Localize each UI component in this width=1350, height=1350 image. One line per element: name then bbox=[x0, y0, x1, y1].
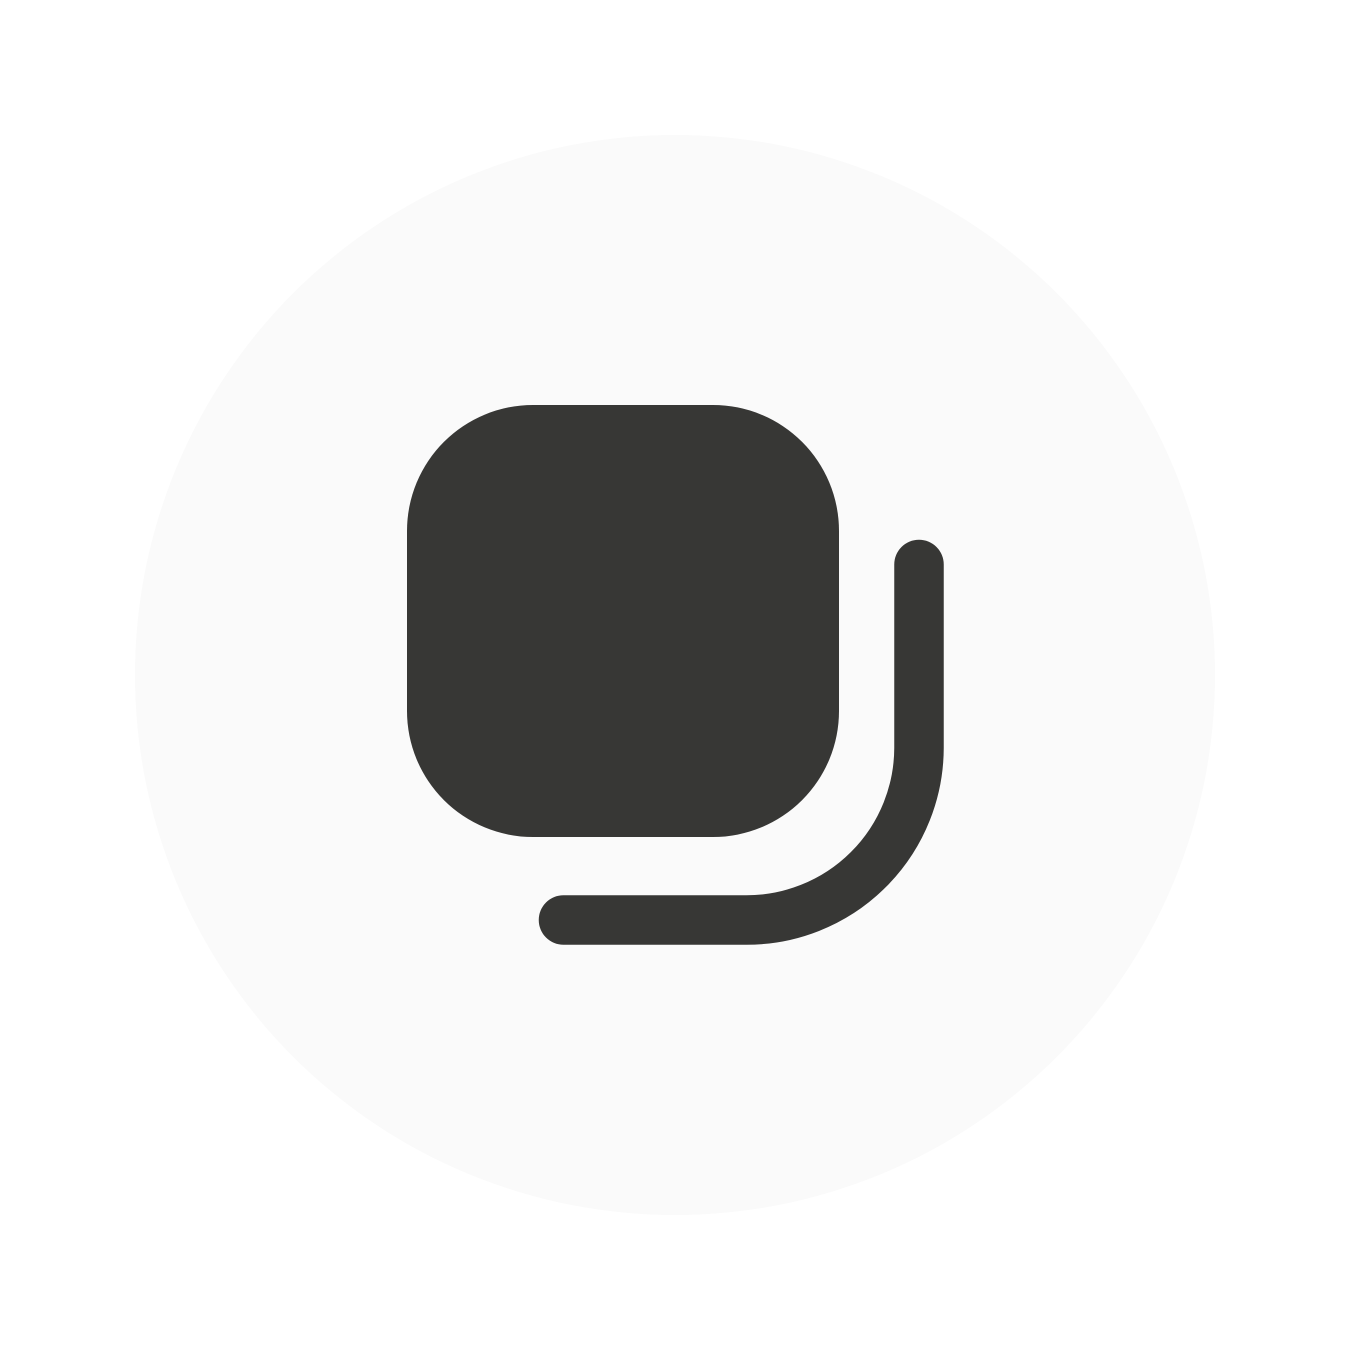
icon: filled rounded square bbox=[407, 405, 839, 837]
background circle bbox=[135, 135, 1215, 1215]
icon: curved stacked-layer stroke bbox=[564, 564, 919, 920]
